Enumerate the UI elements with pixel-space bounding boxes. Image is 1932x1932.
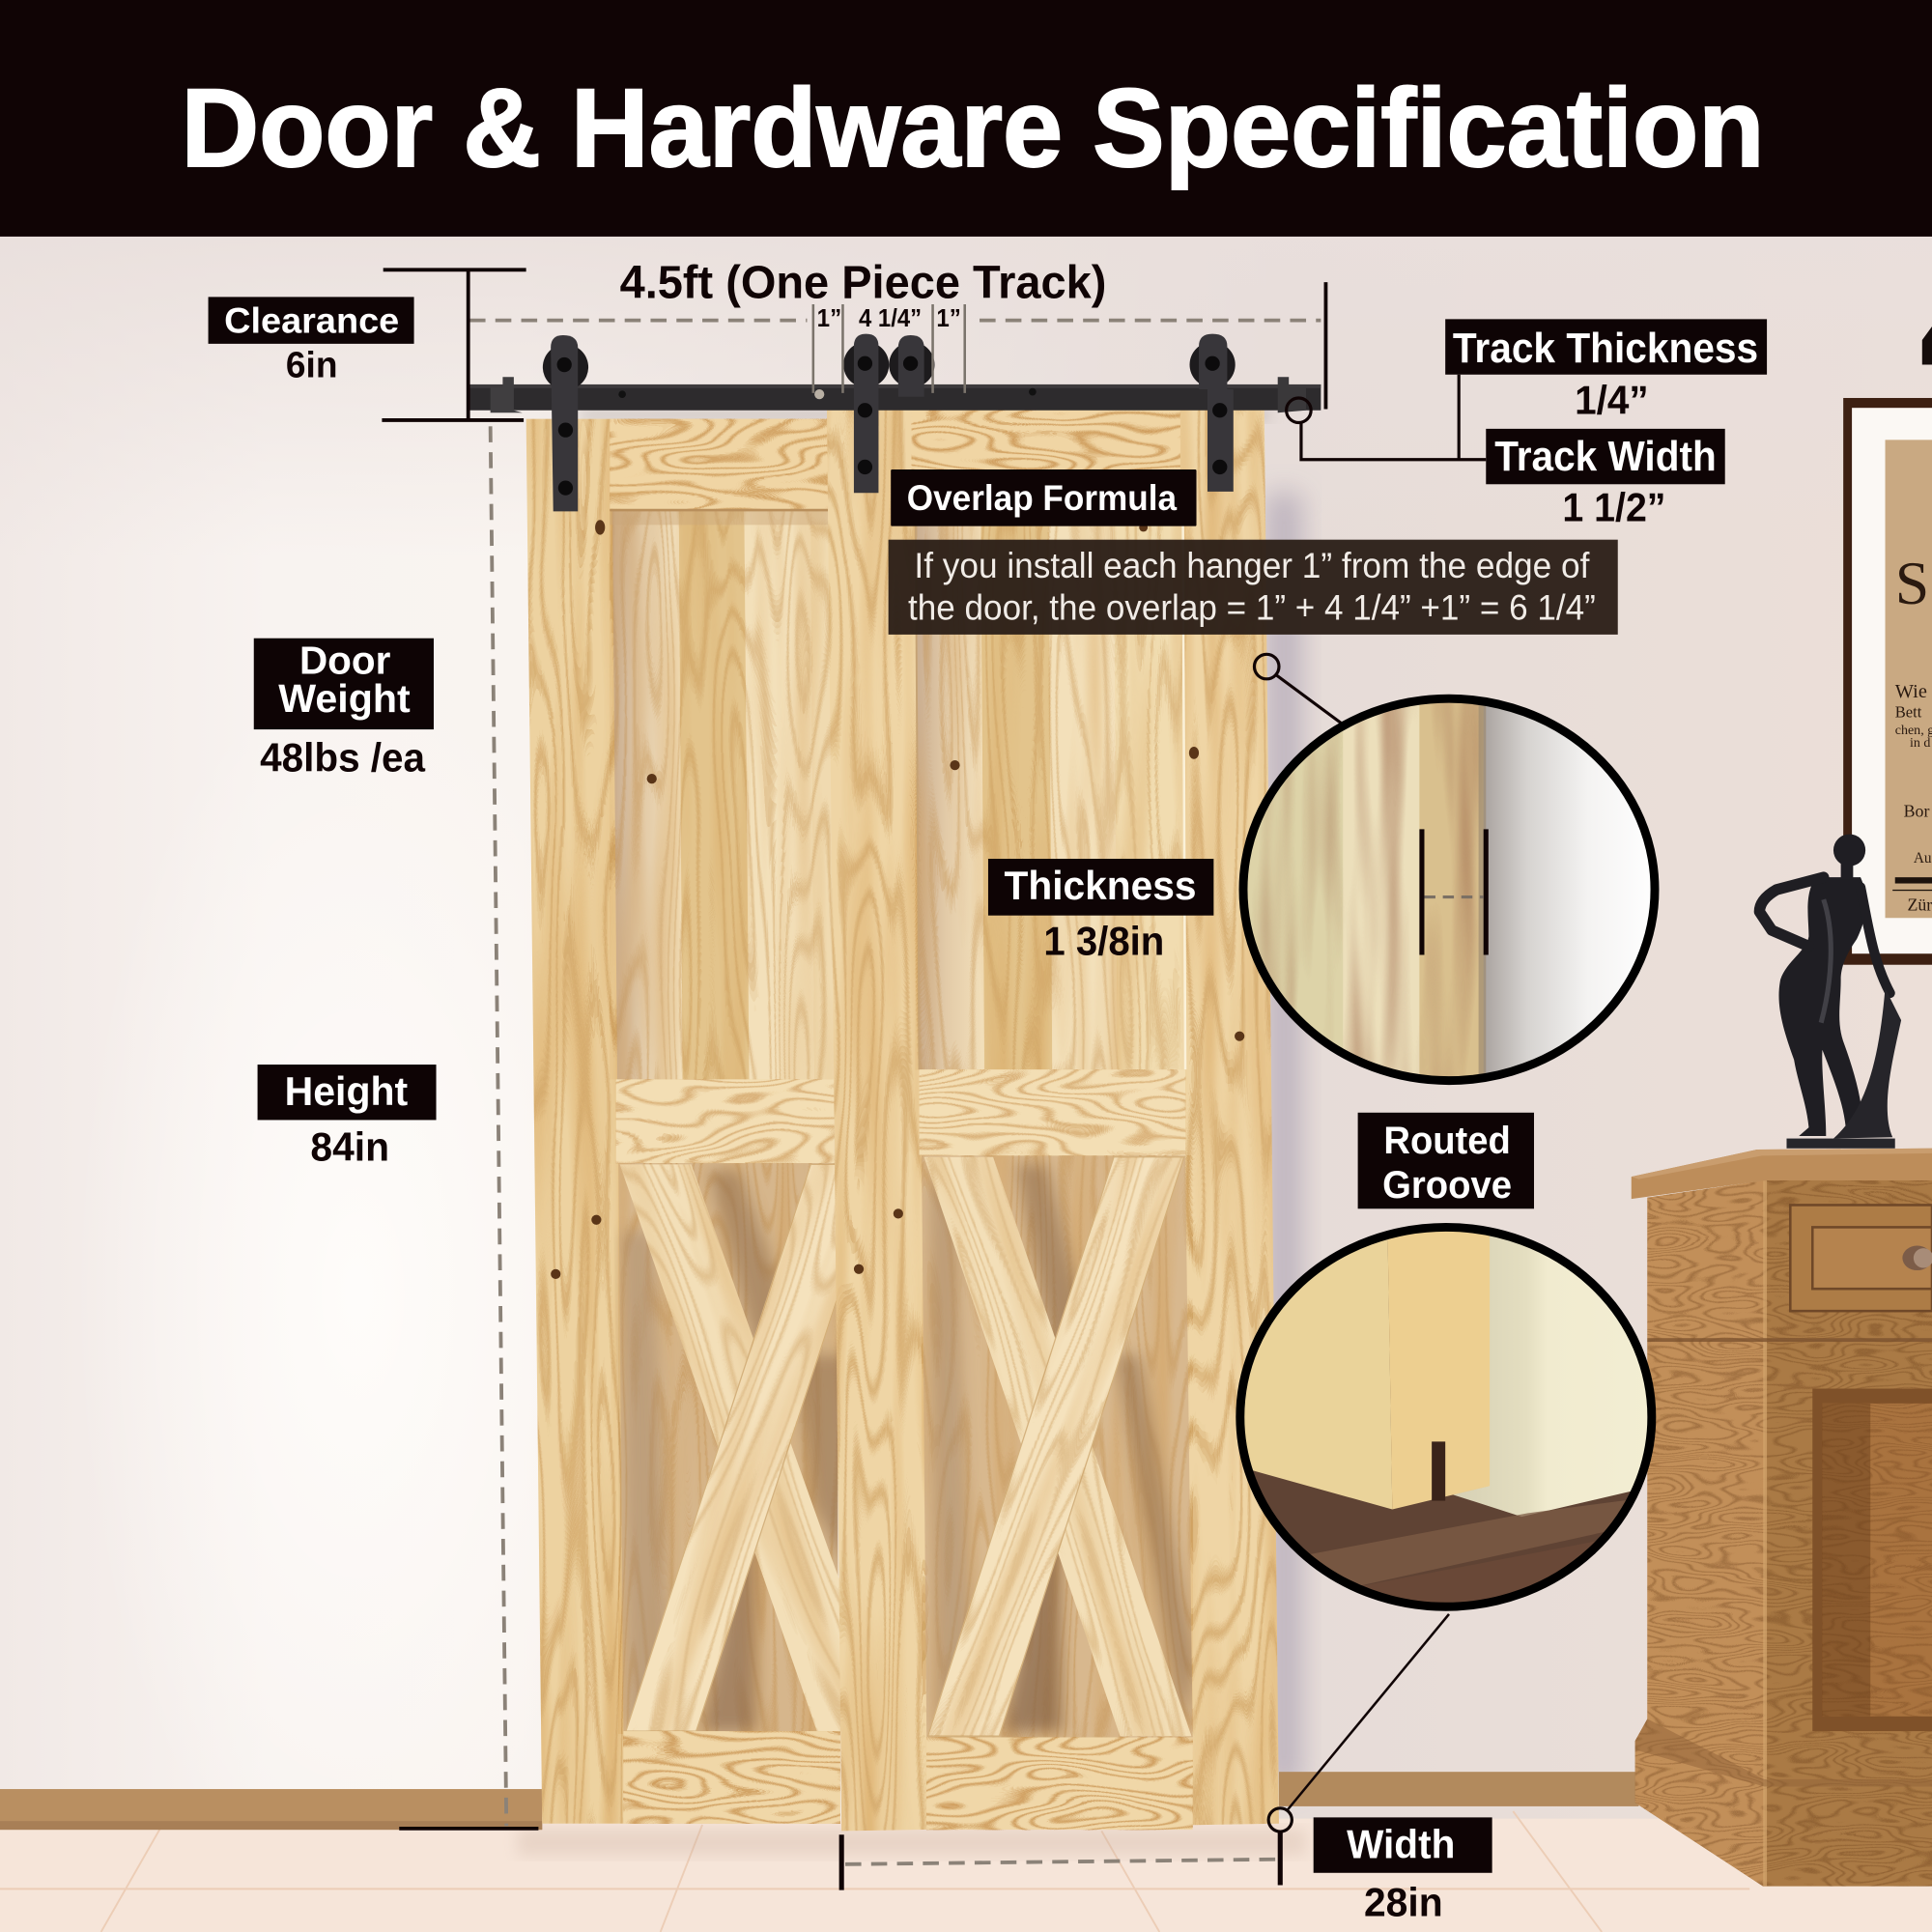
picture frame with old document: S bbox=[1895, 549, 1929, 617]
height label: 84in bbox=[310, 1124, 389, 1170]
left door bottom rail bbox=[623, 1731, 840, 1824]
track thickness label: 1/4” bbox=[1575, 378, 1649, 423]
left door front brace bbox=[626, 1164, 837, 1731]
statue bbox=[1759, 835, 1901, 1149]
door weight label: Weight bbox=[278, 676, 411, 721]
overlap formula text block: If you install each hanger 1” from the edge of bbox=[914, 546, 1590, 585]
height label: Height bbox=[285, 1068, 408, 1114]
door weight label bbox=[254, 639, 434, 780]
left door stile grain bbox=[526, 419, 846, 1830]
title banner bbox=[0, 0, 1932, 237]
drawer bbox=[1790, 1205, 1932, 1311]
cabinet top slab bbox=[1632, 1149, 1932, 1199]
hanger spacing dimensions bbox=[813, 304, 965, 393]
track thickness and width leader bbox=[1287, 375, 1486, 460]
thickness label bbox=[988, 859, 1213, 964]
overlap formula text block: the door, the overlap = 1” + 4 1/4” +1” = 6 1/4” bbox=[908, 588, 1596, 628]
right door bbox=[827, 397, 1280, 1831]
track shadow bbox=[579, 409, 1269, 421]
left door upper panel bbox=[610, 510, 835, 1079]
clearance label bbox=[209, 297, 414, 385]
width label: 28in bbox=[1364, 1879, 1443, 1924]
right door back brace bbox=[923, 1157, 1192, 1737]
track width label bbox=[1486, 429, 1725, 530]
clearance label: Clearance bbox=[224, 300, 399, 340]
left door lower panel bbox=[618, 1163, 850, 1734]
door weight label: Door bbox=[299, 639, 390, 683]
picture frame with old document: Wie bbox=[1895, 681, 1927, 702]
overlap formula heading bbox=[891, 469, 1197, 526]
partial black shape at right edge bbox=[1922, 327, 1932, 365]
width dimension line bbox=[841, 1833, 1280, 1890]
track width label: Track Width bbox=[1494, 434, 1717, 480]
track thickness label: Track Thickness bbox=[1453, 326, 1758, 372]
picture frame with old document: in d bbox=[1910, 735, 1930, 751]
right door lower panel bbox=[922, 1155, 1195, 1737]
thickness magnifier circle bbox=[1233, 690, 1659, 1091]
right door knots bbox=[854, 523, 1244, 1274]
hanger 4 bbox=[1190, 334, 1236, 492]
width label bbox=[1314, 1817, 1492, 1924]
right door top rail bbox=[912, 397, 1180, 502]
routed groove label bbox=[1358, 1113, 1534, 1208]
hanger spacing dimensions: 1” bbox=[817, 305, 841, 332]
track thickness label bbox=[1445, 319, 1767, 423]
overlap formula text block bbox=[889, 540, 1618, 635]
floor tiles bbox=[0, 1811, 1932, 1932]
hanger 1 bbox=[543, 335, 588, 511]
picture frame with old document: Bett bbox=[1895, 702, 1922, 721]
barn door track bbox=[469, 377, 1321, 412]
clearance dimension lines bbox=[382, 270, 526, 420]
left door bbox=[526, 419, 840, 1824]
left door middle rail bbox=[616, 1079, 835, 1163]
right door middle rail bbox=[920, 1069, 1185, 1155]
right door stile grain bbox=[827, 397, 1280, 1831]
baseboards bbox=[0, 1772, 1638, 1830]
overlap formula heading: Overlap Formula bbox=[907, 478, 1178, 518]
hanger spacing dimensions: 4 1/4” bbox=[859, 305, 922, 332]
thickness label: 1 3/8in bbox=[1043, 919, 1164, 964]
routed groove label: Groove bbox=[1382, 1164, 1512, 1207]
left door top rail bbox=[610, 419, 828, 510]
width leader line bbox=[1268, 1614, 1449, 1832]
door weight label: 48lbs /ea bbox=[260, 734, 426, 780]
thickness measure marks bbox=[1422, 829, 1486, 955]
right door bottom rail bbox=[926, 1737, 1193, 1830]
left door knots bbox=[551, 520, 657, 1279]
right door front brace bbox=[927, 1156, 1184, 1737]
track width label: 1 1/2” bbox=[1562, 485, 1665, 530]
picture frame with old document: Bor bbox=[1904, 802, 1929, 821]
picture frame with old document: Au bbox=[1914, 850, 1932, 867]
width label: Width bbox=[1347, 1821, 1455, 1866]
lower cabinet panel bbox=[1812, 1389, 1932, 1731]
right door upper panel bbox=[916, 502, 1185, 1069]
routed groove label: Routed bbox=[1383, 1120, 1511, 1162]
cabinet bbox=[1627, 1149, 1932, 1895]
routed groove magnifier circle bbox=[1233, 1220, 1663, 1620]
picture frame with old document bbox=[1843, 398, 1932, 965]
hanger 3 bbox=[889, 335, 934, 397]
track length dimension: 4.5ft (One Piece Track) bbox=[620, 257, 1106, 309]
picture frame with old document: Zür bbox=[1907, 895, 1932, 915]
clearance label: 6in bbox=[286, 344, 337, 385]
thickness leader line bbox=[1254, 654, 1343, 724]
height dimension line bbox=[399, 426, 538, 1829]
height label bbox=[258, 1065, 437, 1170]
left door back brace bbox=[620, 1164, 840, 1731]
thickness label: Thickness bbox=[1005, 863, 1197, 908]
hanger 2 bbox=[843, 334, 889, 493]
hanger spacing dimensions: 1” bbox=[936, 305, 961, 332]
title banner: Door & Hardware Specification bbox=[182, 67, 1765, 190]
